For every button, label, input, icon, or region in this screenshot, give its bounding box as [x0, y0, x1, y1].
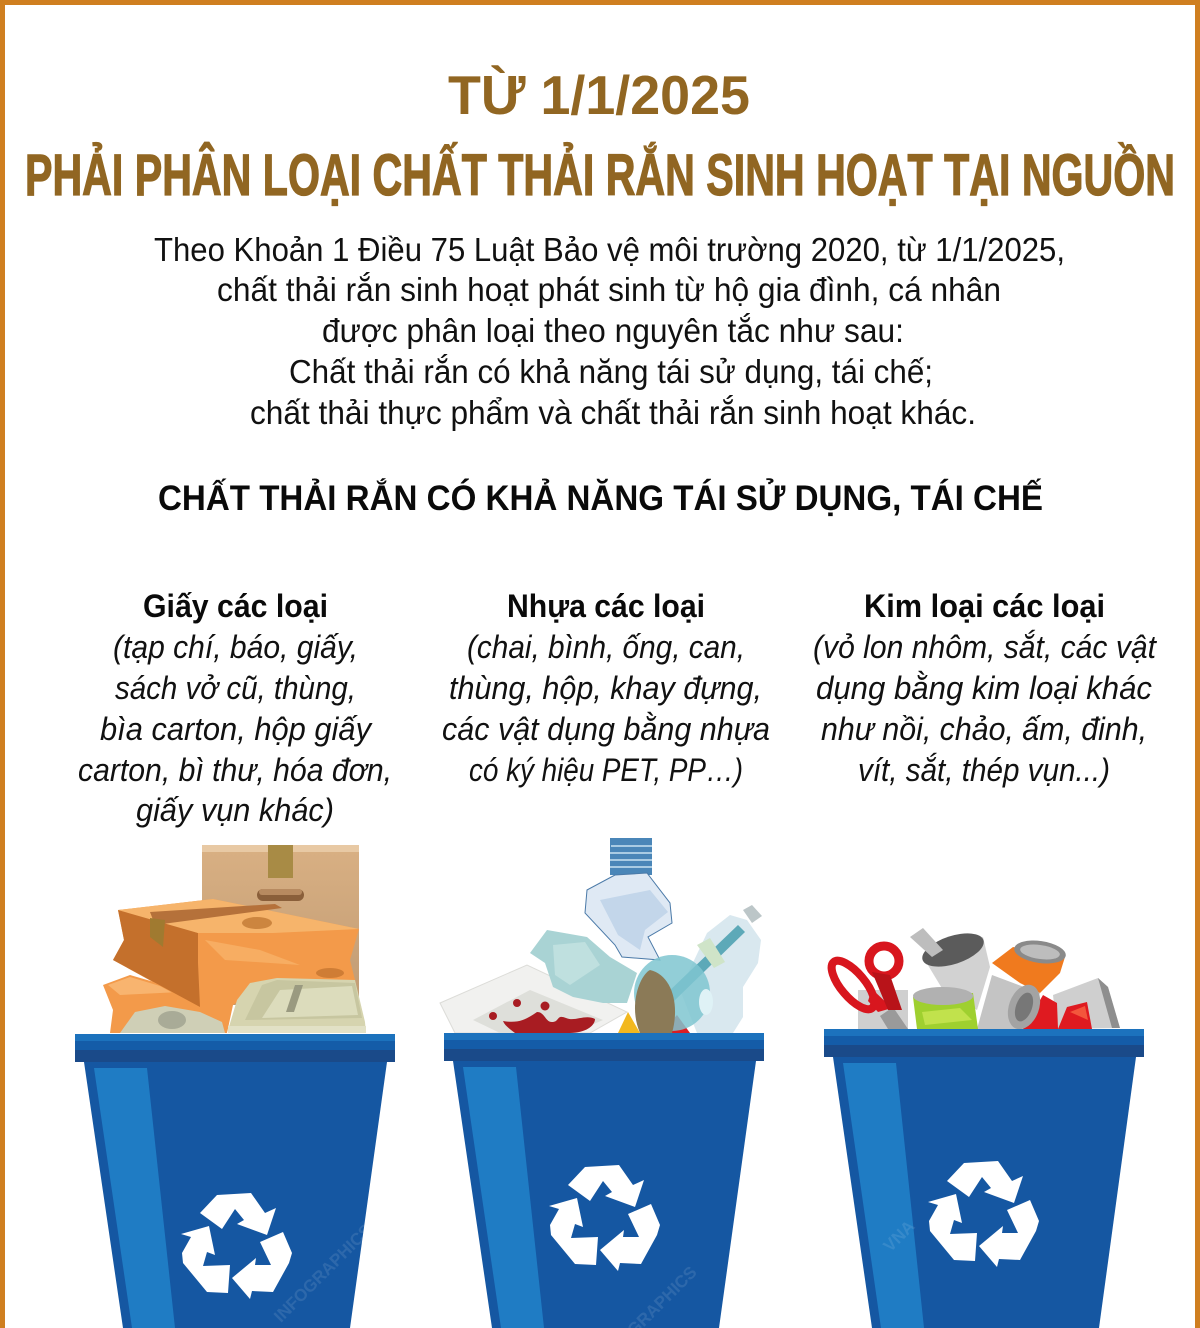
column text: plastic: Nhựa các loại [507, 588, 705, 624]
icon: recycle [181, 1193, 292, 1299]
intro text [154, 231, 1065, 431]
column text: plastic: các vật dụng bằng nhựa [442, 711, 770, 747]
metal bin [824, 1029, 1144, 1328]
column text: metal: như nồi, chảo, ấm, đinh, [821, 711, 1147, 747]
column text: metal: vít, sắt, thép vụn...) [858, 752, 1110, 788]
intro text: Theo Khoản 1 Điều 75 Luật Bảo vệ môi trường 2020, từ 1/1/2025, [154, 231, 1065, 268]
column text: metal [813, 588, 1157, 788]
intro text: được phân loại theo nguyên tắc như sau: [322, 312, 904, 349]
column text: paper: carton, bì thư, hóa đơn, [78, 752, 392, 788]
plastic bin [444, 1033, 764, 1328]
paper bin [75, 1034, 395, 1328]
title [25, 64, 1175, 208]
column text: plastic: thùng, hộp, khay đựng, [449, 670, 762, 706]
icon: recycle [549, 1165, 660, 1271]
column text: paper: (tạp chí, báo, giấy, [113, 629, 358, 665]
column text: paper: giấy vụn khác) [136, 792, 334, 828]
column text: metal: dụng bằng kim loại khác [816, 670, 1152, 706]
paper waste pile [103, 845, 366, 1033]
column text: metal: (vỏ lon nhôm, sắt, các vật [813, 629, 1157, 665]
icon: recycle [928, 1161, 1039, 1267]
column text: paper [78, 588, 392, 828]
intro text: chất thải thực phẩm và chất thải rắn sinh hoạt khác. [250, 394, 976, 431]
intro text: chất thải rắn sinh hoạt phát sinh từ hộ gia đình, cá nhân [217, 271, 1001, 308]
plastic waste pile [440, 838, 762, 1033]
intro text: Chất thải rắn có khả năng tái sử dụng, tái chế; [289, 353, 933, 390]
section heading: CHẤT THẢI RẮN CÓ KHẢ NĂNG TÁI SỬ DỤNG, TÁI CHẾ [158, 478, 1043, 518]
watermark: VNA [880, 1217, 919, 1256]
metal waste pile [825, 927, 1120, 1034]
column text: plastic: có ký hiệu PET, PP…) [469, 752, 743, 788]
title: TỪ 1/1/2025 [448, 64, 750, 126]
column text: paper: sách vở cũ, thùng, [115, 670, 356, 706]
column text: paper: bìa carton, hộp giấy [100, 711, 373, 747]
icon: scissors [825, 946, 908, 1029]
column text: paper: Giấy các loại [143, 588, 328, 624]
watermark: INFOGRAPHICS [270, 1220, 376, 1326]
column text: metal: Kim loại các loại [864, 588, 1105, 624]
column text: plastic [442, 588, 770, 788]
column text: plastic: (chai, bình, ống, can, [467, 629, 745, 665]
